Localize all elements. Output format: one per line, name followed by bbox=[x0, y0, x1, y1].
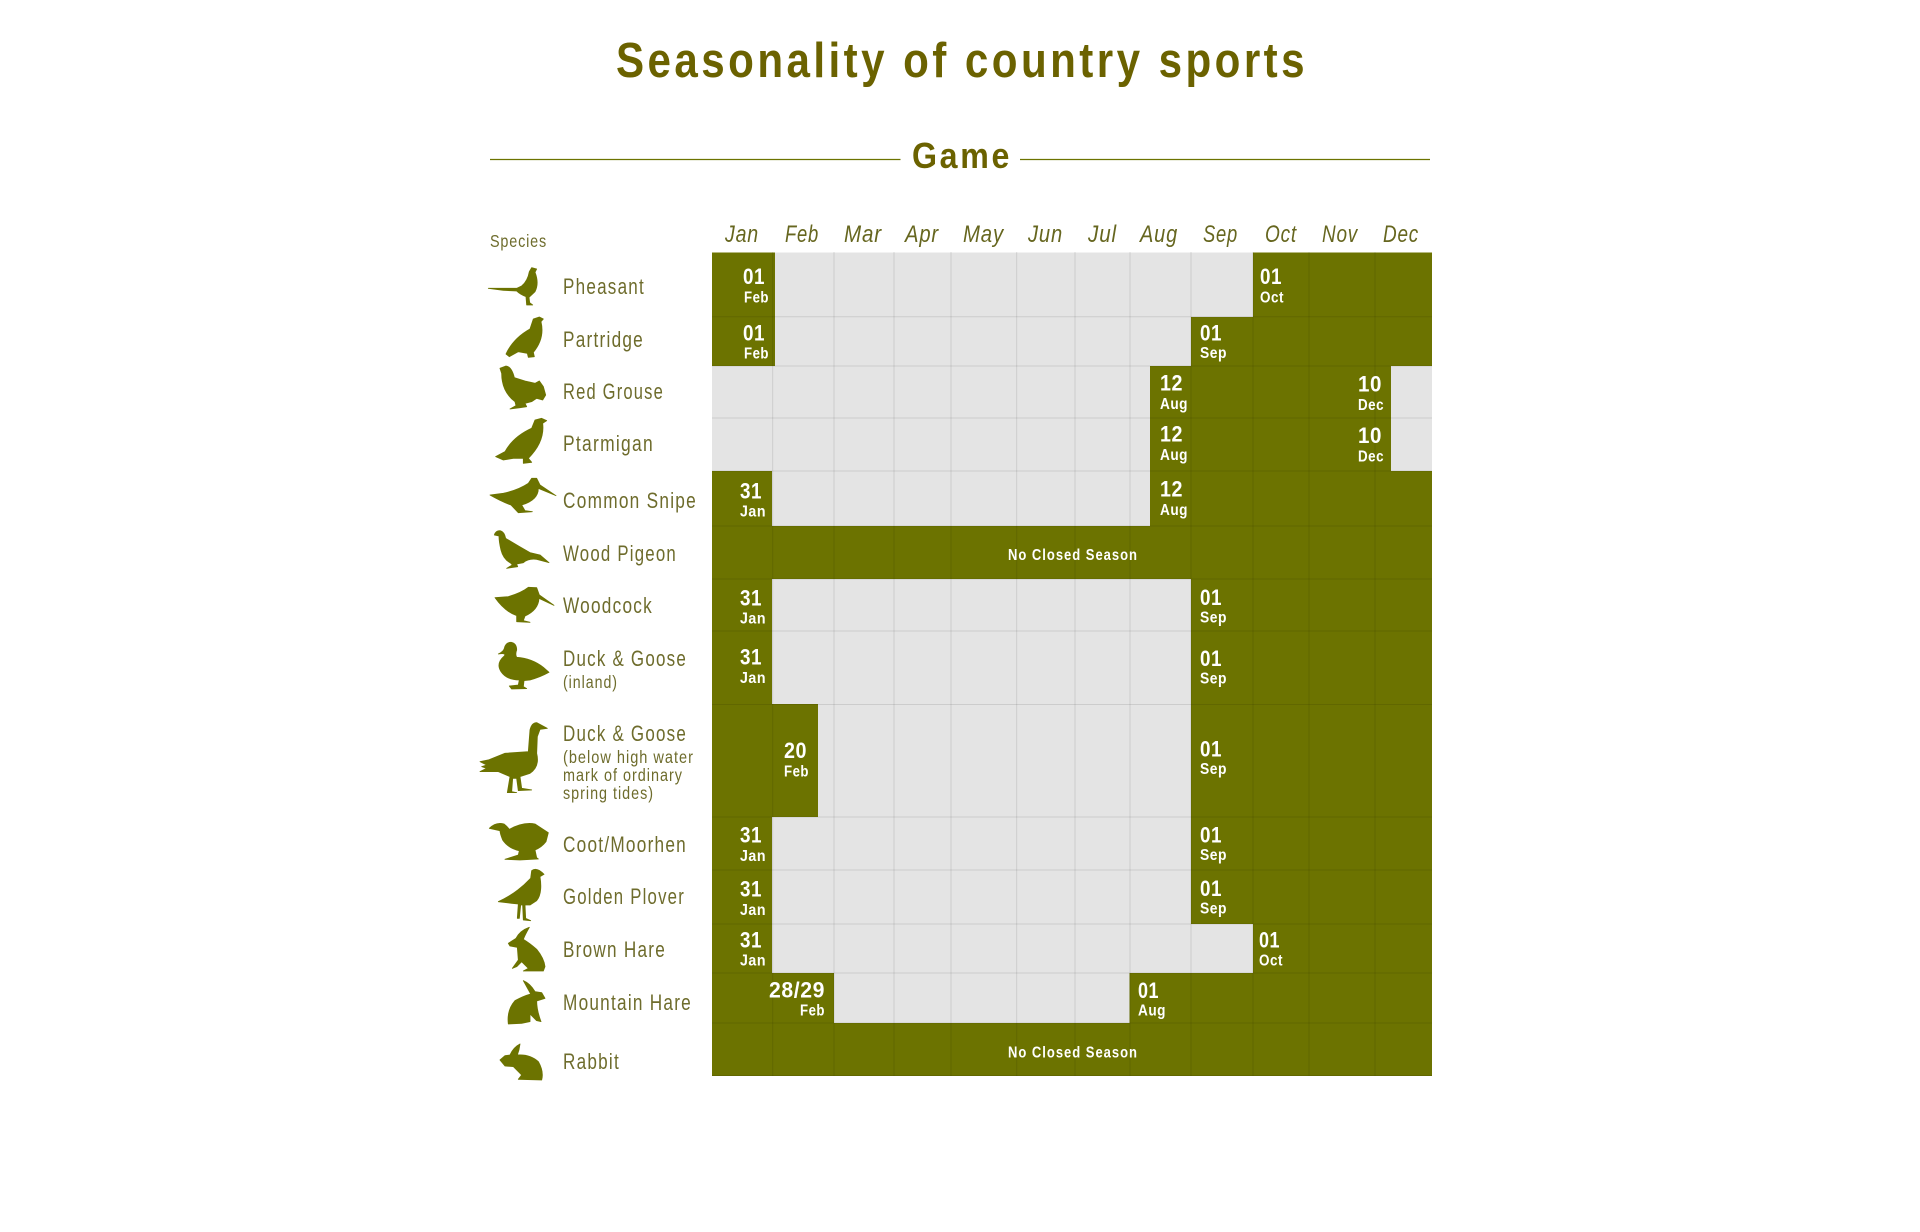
date labels: season ends: 31 bbox=[740, 876, 762, 902]
date labels: season ends: 31 bbox=[740, 586, 762, 610]
species row: Rabbit bbox=[500, 1044, 620, 1080]
date labels: season ends: 31 bbox=[740, 644, 762, 670]
date labels: season ends: Feb bbox=[744, 290, 769, 306]
date labels: season starts bbox=[1138, 264, 1284, 1020]
date labels: season ends: Jan bbox=[740, 848, 766, 865]
month headers: May bbox=[963, 221, 1005, 248]
date labels: season ends: Jan bbox=[740, 610, 766, 628]
species row: Pheasant bbox=[488, 268, 645, 305]
date labels: season starts: 01 bbox=[1200, 876, 1222, 901]
date labels: season ends: 31 bbox=[740, 478, 762, 504]
date labels: season starts: Sep bbox=[1200, 610, 1227, 626]
date labels: season starts: 01 bbox=[1200, 646, 1222, 671]
date labels: season ends: Dec bbox=[1358, 397, 1384, 414]
date labels: season starts: 01 bbox=[1260, 264, 1282, 289]
date labels: season ends: Jan bbox=[740, 902, 766, 919]
species row: Duck and Goose below high water: spring tides) bbox=[563, 783, 654, 803]
title: Seasonality of country sports bbox=[616, 34, 1308, 88]
species row: Brown Hare bbox=[508, 927, 666, 971]
month headers: Sep bbox=[1203, 221, 1238, 248]
species row: Mountain Hare: Mountain Hare bbox=[563, 990, 692, 1015]
species row: Wood Pigeon: Wood Pigeon bbox=[563, 541, 677, 566]
date labels: season starts: Aug bbox=[1160, 396, 1188, 413]
date labels: season ends: Dec bbox=[1358, 448, 1384, 466]
date labels: season starts: 01 bbox=[1200, 736, 1222, 762]
month headers: Jun bbox=[1027, 221, 1063, 248]
date labels: season starts: 01 bbox=[1138, 978, 1159, 1003]
date labels: season ends: 31 bbox=[740, 822, 762, 848]
species row: Mountain Hare bbox=[508, 981, 692, 1024]
species row: Ptarmigan: Ptarmigan bbox=[563, 431, 654, 456]
date labels: season ends: 01 bbox=[743, 264, 765, 289]
date labels: season ends: 31 bbox=[740, 928, 762, 952]
date labels: season ends: Feb bbox=[800, 1002, 825, 1020]
date labels: season ends: 20 bbox=[784, 738, 807, 763]
species row: Coot/Moorhen: Coot/Moorhen bbox=[563, 832, 687, 857]
date labels: season starts: 01 bbox=[1200, 320, 1222, 346]
date labels: season ends: Feb bbox=[784, 764, 809, 780]
date labels: season ends: Jan bbox=[740, 504, 766, 520]
date labels: season starts: Oct bbox=[1259, 952, 1283, 970]
species row: Ptarmigan bbox=[496, 418, 654, 463]
date labels: season starts: 01 bbox=[1200, 822, 1222, 848]
date labels: season ends: 10 bbox=[1358, 423, 1382, 448]
section heading: Game: Game bbox=[912, 135, 1012, 176]
date labels: season ends: Jan bbox=[740, 952, 766, 970]
date labels: season starts: Oct bbox=[1260, 290, 1284, 306]
date labels: season starts: 12 bbox=[1160, 422, 1183, 446]
date labels: season starts: Sep bbox=[1200, 345, 1227, 362]
date labels: season ends: Feb bbox=[744, 346, 769, 362]
month headers: Apr bbox=[903, 221, 939, 248]
date labels: season starts: Aug bbox=[1160, 502, 1188, 519]
species row: Coot/Moorhen bbox=[489, 823, 687, 860]
month headers: Mar bbox=[844, 221, 882, 248]
date labels: season ends: 01 bbox=[743, 320, 765, 346]
species row: Woodcock bbox=[495, 587, 653, 622]
grid lines bbox=[712, 252, 1432, 1076]
species column heading: Species bbox=[490, 231, 547, 251]
species row: Duck and Goose inland bbox=[498, 642, 687, 692]
no closed season label: Wood Pigeon: No Closed Season bbox=[1008, 547, 1138, 564]
date labels: season ends: 28/29 bbox=[769, 978, 825, 1002]
species row: Duck and Goose inland: (inland) bbox=[563, 672, 618, 692]
species row: Duck and Goose inland: Duck & Goose bbox=[563, 646, 687, 671]
date labels: season starts: Sep bbox=[1200, 670, 1227, 688]
species row: Duck and Goose below high water: Duck & Goose bbox=[563, 721, 687, 746]
date labels: season starts: 01 bbox=[1259, 928, 1280, 952]
species row: Golden Plover: Golden Plover bbox=[563, 884, 685, 909]
closed season cells bbox=[712, 252, 1432, 1023]
species row: Duck and Goose below high water: mark of ordinary bbox=[563, 765, 683, 785]
date labels: season starts: Aug bbox=[1160, 447, 1188, 464]
date labels: season starts: Aug bbox=[1138, 1002, 1166, 1020]
species row: Red Grouse: Red Grouse bbox=[563, 379, 664, 404]
no closed season label: Rabbit: No Closed Season bbox=[1008, 1044, 1138, 1062]
month headers: Oct bbox=[1265, 221, 1297, 248]
species row: Woodcock: Woodcock bbox=[563, 593, 653, 618]
date labels: season starts: 12 bbox=[1160, 370, 1183, 396]
month headers: Nov bbox=[1322, 221, 1359, 248]
date labels: season starts: Sep bbox=[1200, 761, 1227, 778]
species row: Red Grouse bbox=[500, 366, 664, 409]
species row: Rabbit: Rabbit bbox=[563, 1049, 620, 1074]
date labels: season starts: Sep bbox=[1200, 847, 1227, 864]
season chart bbox=[712, 252, 1432, 1076]
date labels: season starts: 01 bbox=[1200, 585, 1222, 610]
month headers: Aug bbox=[1138, 221, 1178, 248]
species row: Common Snipe bbox=[490, 478, 697, 513]
species row: Partridge bbox=[506, 317, 644, 357]
species row: Duck and Goose below high water: (below high water bbox=[563, 747, 694, 767]
date labels: season starts: Sep bbox=[1200, 900, 1227, 918]
species row: Brown Hare: Brown Hare bbox=[563, 937, 666, 962]
month headers bbox=[724, 221, 1419, 248]
species row: Golden Plover bbox=[498, 869, 685, 921]
species row: Pheasant: Pheasant bbox=[563, 274, 645, 299]
month headers: Feb bbox=[785, 221, 819, 248]
species row: Partridge: Partridge bbox=[563, 327, 644, 352]
date labels: season ends: Jan bbox=[740, 670, 766, 687]
species row: Duck and Goose below high water bbox=[480, 721, 694, 803]
species list bbox=[480, 268, 697, 1080]
date labels: season ends: 10 bbox=[1358, 372, 1382, 396]
date labels: season starts: 12 bbox=[1160, 476, 1183, 502]
species row: Wood Pigeon bbox=[494, 531, 677, 568]
date labels: season ends bbox=[740, 264, 1384, 1020]
species row: Common Snipe: Common Snipe bbox=[563, 488, 697, 513]
month headers: Dec bbox=[1383, 221, 1419, 248]
month headers: Jul bbox=[1087, 221, 1117, 248]
month headers: Jan bbox=[724, 221, 759, 248]
